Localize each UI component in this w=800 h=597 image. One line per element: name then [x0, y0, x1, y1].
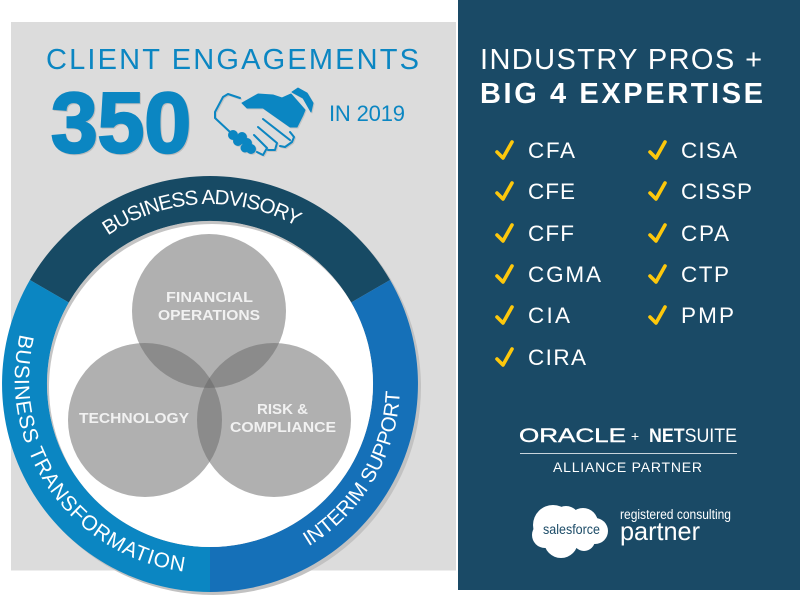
ring label: interim support: INTERIM SUPPORT: [302, 391, 400, 546]
ring segment: business advisory: [30, 176, 390, 302]
certification labels: CGMA: [528, 262, 601, 287]
venn label: financial operations: FINANCIAL: [166, 290, 253, 306]
certification labels: CISA: [681, 138, 737, 163]
certification labels: CTP: [681, 262, 729, 287]
ring label: business advisory: BUSINESS ADVISORY: [102, 190, 303, 235]
logo: oracle + netsuite alliance partner: ALLIANCE PARTNER: [553, 459, 702, 475]
certification labels: [528, 138, 752, 370]
venn label: risk and compliance: RISK &: [257, 402, 309, 418]
venn label: financial operations: OPERATIONS: [158, 308, 260, 324]
partner tagline: [620, 507, 731, 546]
logo: salesforce registered consulting partner: [532, 505, 731, 558]
certification labels: PMP: [681, 303, 734, 328]
partner tagline: partner: [620, 516, 700, 546]
circular diagram: [2, 176, 421, 595]
salesforce wordmark: salesforce: [543, 521, 600, 537]
panel: client engagements: [11, 22, 456, 570]
logo: oracle + netsuite alliance partner: +: [631, 428, 639, 444]
venn diagram: [68, 234, 351, 497]
logo: oracle + netsuite alliance partner: ORACLE: [519, 425, 626, 447]
big number 350: 350: [51, 76, 191, 171]
label: in 2019: IN 2019: [329, 101, 405, 126]
icons: yellow checks: [497, 142, 665, 365]
certification labels: CFA: [528, 138, 575, 163]
ring segment: business transformation: [2, 280, 210, 592]
certification labels: CIA: [528, 303, 570, 328]
venn label: financial operations: [158, 290, 260, 324]
title: client engagements: CLIENT ENGAGEMENTS: [46, 44, 419, 76]
venn label: risk and compliance: [230, 402, 336, 436]
venn label: risk and compliance: COMPLIANCE: [230, 420, 336, 436]
certification labels: CFF: [528, 221, 574, 246]
heading: industry pros: INDUSTRY PROS +: [480, 44, 762, 76]
panel: credentials: [458, 0, 800, 590]
logo: oracle + netsuite alliance partner: [519, 425, 737, 475]
certification labels: CPA: [681, 221, 729, 246]
certification labels: CFE: [528, 179, 575, 204]
certification list: [497, 138, 752, 370]
inner white disc: [47, 221, 375, 550]
certification labels: CISSP: [681, 179, 752, 204]
logo: oracle + netsuite alliance partner: NETSUITE: [649, 425, 737, 447]
icon: salesforce cloud: [532, 505, 608, 558]
venn label: technology: TECHNOLOGY: [79, 411, 189, 427]
certification labels: CIRA: [528, 345, 586, 370]
heading: big 4 expertise: BIG 4 EXPERTISE: [480, 78, 763, 110]
ring label: business transformation: BUSINESS TRANSFORMATION: [14, 336, 184, 572]
partner tagline: registered consulting: [620, 507, 731, 522]
ring segment: interim support: [210, 280, 418, 592]
icon: handshake: [215, 88, 313, 155]
